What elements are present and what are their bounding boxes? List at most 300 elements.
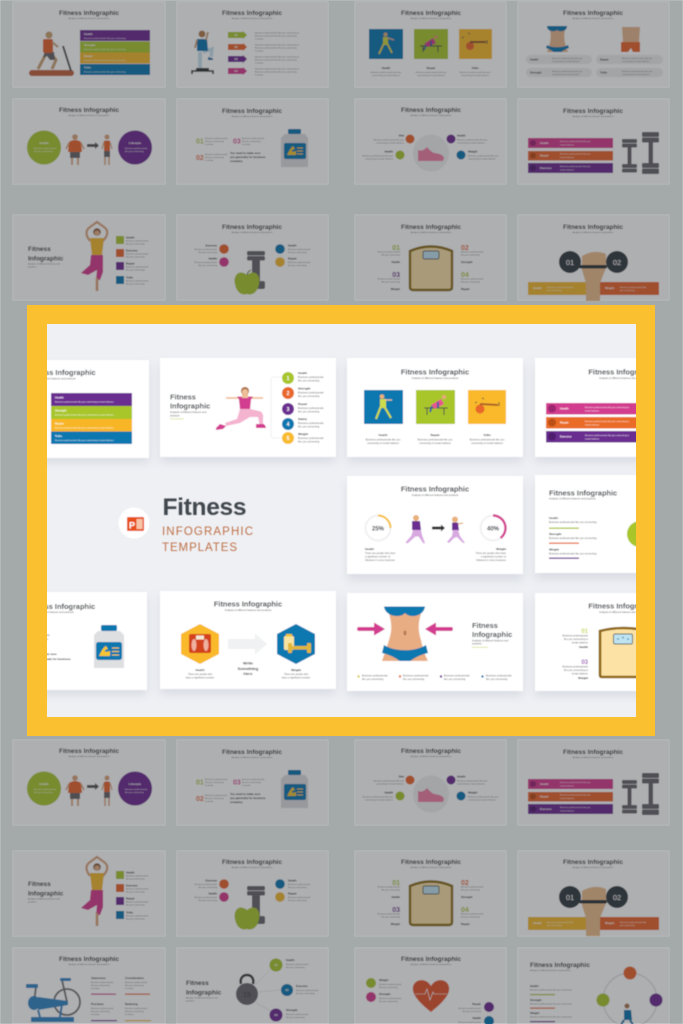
slide: hand and weight	[518, 215, 669, 301]
slide: weight scale (repeat): Health	[391, 895, 400, 899]
slide: weight loss circles	[13, 99, 165, 184]
yellow frame	[27, 305, 655, 736]
slide: supplement bottle: Analysis of different features and products	[232, 115, 273, 118]
hexagon captions: Weight	[291, 668, 301, 672]
text columns: to innate	[91, 987, 100, 990]
icon: bottle	[94, 625, 124, 668]
slide: weight loss circles: Analysis of different features and products	[69, 114, 110, 117]
subheading: TEMPLATES	[162, 542, 237, 554]
slide: yoga pose (repeat)	[13, 851, 165, 936]
square captions: Tollis	[483, 433, 491, 437]
slide: running shoe (repeat): Weight	[468, 790, 477, 794]
icon: male torso	[621, 27, 640, 52]
square captions: Business professionals like you	[366, 438, 401, 442]
green circle: Health	[39, 141, 49, 145]
card: bottle cut off: Analysis of different features and products	[27, 611, 74, 614]
numbered list: Safety	[298, 417, 307, 421]
bars: innate balance	[560, 144, 575, 146]
text columns: to innate	[91, 1013, 100, 1016]
square: bench	[416, 390, 455, 424]
slide: supplement bottle	[177, 99, 328, 184]
bullet notes	[357, 674, 512, 681]
slide: dumbbells (repeat): Business professionals like you	[560, 781, 591, 784]
scale labels: like you connecting	[461, 254, 480, 256]
side labels: like you connecting	[379, 1000, 398, 1003]
slide: running shoe (repeat): connecting to innate balance	[457, 782, 486, 786]
numbered items: like you connecting	[205, 140, 224, 143]
foreground slides	[24, 358, 657, 696]
captions: Health	[365, 547, 374, 551]
lower repeat row 1	[13, 740, 669, 825]
note: You need to make sure	[24, 652, 57, 656]
item 03: 03	[581, 660, 589, 666]
slide: running shoe (repeat): Business professionals like you	[374, 780, 405, 782]
icon: kettlebell: 15	[243, 992, 251, 999]
slide: weight scale (repeat): Business professionals	[378, 886, 401, 888]
slide: weight loss circles (repeat): like you connecting	[125, 791, 144, 794]
text columns: like you connecting	[91, 1010, 110, 1013]
text columns: to innate	[125, 987, 134, 990]
heading: Analysis of different features and	[186, 996, 219, 1000]
slide: hand and weight (repeat)	[518, 851, 669, 936]
card: bottle cut off	[24, 592, 147, 690]
square captions: connecting to innate balance	[372, 74, 401, 77]
square captions: connecting to innate balance	[419, 442, 452, 445]
side labels: Repair	[472, 1002, 482, 1006]
note	[47, 634, 71, 660]
numbered nodes: like you connecting	[286, 1016, 305, 1019]
icon: torso	[382, 606, 428, 661]
square: bench	[414, 29, 448, 59]
icon list	[116, 236, 149, 286]
numbered nodes	[256, 958, 319, 1022]
side labels: Business professionals	[195, 261, 218, 264]
slide: supplement bottle (repeat): like you connecting	[242, 781, 261, 784]
slide: hand and weight (repeat): you connecting	[620, 924, 635, 927]
heading: Infographic	[170, 402, 210, 410]
slide: torsos and pills: Fitness Infographic	[563, 10, 623, 17]
pills: Strength	[530, 70, 542, 74]
ring diagram	[596, 966, 662, 1024]
slide: supplement bottle (repeat): You need to make sure	[230, 792, 261, 796]
side labels: like you connecting	[198, 264, 218, 267]
slide: yoga pose	[13, 215, 165, 300]
note: you generally made for business	[24, 657, 71, 661]
descriptions: in innate	[255, 62, 264, 64]
slide: dumbbells: Fitness Infographic	[563, 108, 623, 115]
card: bottle cut off: Fitness Infographic	[27, 602, 95, 611]
card: scale cut off: Fitness Infographic	[588, 602, 657, 610]
slide: supplement bottle (repeat): to innate	[242, 784, 251, 787]
card: three squares: Fitness Infographic	[401, 368, 469, 376]
item 01	[562, 629, 589, 649]
subheading: INFOGRAPHIC	[162, 526, 253, 538]
numbered items: 02	[196, 155, 204, 162]
slide: running shoe (repeat): Diet	[399, 774, 404, 778]
icon: apple	[235, 270, 259, 294]
slide: apple and dumbbell (repeat): like you connecting	[198, 899, 218, 902]
icon: bottle	[281, 129, 308, 167]
centre title block	[118, 494, 253, 554]
arrow	[432, 524, 445, 532]
bullet notes: like you connecting	[362, 678, 384, 681]
stacked colored bars: Strength	[84, 43, 96, 47]
slide: weight loss circles (repeat): Business professionals	[125, 788, 148, 791]
slide: yoga pose (repeat): Analysis of different features and	[28, 898, 61, 900]
purple circle	[118, 130, 152, 164]
icon list: like you connecting	[126, 282, 145, 286]
captions: a significant number of	[365, 556, 390, 558]
numbered list	[282, 371, 324, 444]
slide: hand and weight: Analysis of different features and products	[573, 231, 614, 234]
captions: followers in every business	[365, 559, 396, 562]
slide: exercise bike: Analysis of different features and products	[69, 963, 110, 966]
heading	[28, 246, 64, 268]
hexagon: scale	[181, 624, 219, 664]
card: progress rules: Fitness Infographic	[549, 488, 617, 498]
orbit nodes: connecting to innate balance	[468, 158, 497, 160]
item 01: 01	[581, 629, 589, 635]
card: three bars cut off: Fitness Infographic	[588, 368, 657, 376]
icon: bike	[26, 978, 80, 1022]
bullet notes: Business professionals	[444, 674, 470, 678]
icon: fist	[579, 252, 607, 301]
slide: hand and weight (repeat): Business professionals like	[620, 921, 647, 924]
bar: health: Health	[560, 406, 569, 410]
square captions: connecting to innate balance	[417, 74, 446, 77]
slide: weight scale (repeat): like you connecting	[381, 916, 401, 918]
slide: yoga pose (repeat): like you connecting	[126, 904, 145, 906]
numbered arrows	[228, 31, 247, 75]
pills: Tollis	[600, 70, 608, 74]
arrow label	[238, 660, 259, 676]
orbit nodes: Health	[384, 150, 393, 154]
side labels: like you connecting	[288, 264, 307, 267]
icon: heavy man	[66, 134, 84, 165]
side labels: Business professionals	[288, 261, 311, 264]
hexagon captions: There are people who	[284, 673, 309, 676]
bullet notes: Business professionals	[362, 674, 388, 678]
slide: running shoe (repeat): Analysis of different features and products	[411, 755, 452, 758]
numbered list: like you connecting	[298, 440, 320, 444]
descriptions: in innate	[255, 74, 264, 76]
slide: heart: Analysis of different features and products	[411, 963, 452, 966]
slide: supplement bottle (repeat)	[177, 740, 328, 825]
bullet notes: like you connecting	[403, 678, 425, 681]
slide: running shoe (repeat): Business professionals like you	[457, 780, 488, 782]
text columns	[91, 976, 151, 1021]
hexagon captions: There are people who	[188, 673, 213, 676]
descriptions	[255, 32, 300, 76]
bar: strength: Business professionals like you connecting to innate balance	[55, 414, 115, 416]
slide: weight scale (repeat): Weight	[391, 922, 400, 926]
icon list: Business professionals	[126, 280, 149, 282]
card: hexagons: Fitness Infographic	[214, 600, 282, 608]
item 03: Business professionals	[562, 666, 589, 668]
numbered nodes: like you connecting	[286, 966, 305, 969]
scale labels: like you connecting	[381, 254, 401, 256]
card: stacked bars: Fitness Infographic	[28, 368, 96, 377]
numbered list: Business professionals	[298, 437, 324, 440]
slide: yoga pose (repeat): Exercise	[126, 884, 138, 888]
card: three squares	[347, 358, 523, 457]
side labels: Exercise	[205, 244, 217, 248]
side labels: Business professionals	[288, 248, 311, 251]
rows: Business professionals like you connecting	[549, 537, 597, 540]
numbered list: Business professionals	[298, 407, 324, 410]
text columns: Business professionals	[125, 1007, 148, 1010]
slide: running shoe (repeat): Health	[384, 790, 393, 794]
note: company	[24, 662, 38, 666]
heading: Fitness	[186, 980, 209, 987]
slide: dumbbells (repeat): innate balance	[560, 784, 575, 788]
pills: connecting to innate balance	[622, 60, 651, 63]
slide: yoga pose (repeat): Business professionals	[126, 888, 149, 890]
icon: stepper figure	[192, 31, 213, 74]
side labels: like you connecting	[462, 1010, 482, 1013]
slide: three squares: Analysis of different features and products	[411, 17, 452, 20]
slide: dumbbells (repeat): Health	[540, 782, 549, 786]
slide: weight scale (repeat): Strength	[461, 895, 473, 899]
orange and yellow bars: you connecting	[547, 289, 562, 292]
orbit nodes: connecting to innate balance	[457, 142, 486, 144]
scale labels: Repair	[461, 287, 471, 291]
heading: Fitness	[170, 392, 196, 402]
stacked colored bars: Business professionals like you connecting	[84, 48, 126, 51]
slide: weight loss circles (repeat): Analysis of different features and products	[69, 755, 110, 758]
numbered items: like you connecting	[205, 156, 224, 159]
captions: a significant number of	[481, 556, 506, 558]
side labels	[366, 978, 494, 1024]
numbered items: Business professionals	[242, 137, 265, 140]
descriptions: Business professionals like you connecting to	[255, 56, 300, 58]
item 03	[562, 660, 589, 680]
slide: weight scale (repeat): Business professionals	[461, 886, 484, 888]
slide: apple and dumbbell (repeat): Repair	[288, 892, 298, 896]
numbered list: Weight	[298, 432, 308, 436]
slide: yoga pose (repeat): Business professionals	[126, 900, 149, 904]
descriptions: Business professionals like you connecting	[255, 46, 297, 50]
orbit nodes: connecting to innate balance	[365, 158, 394, 160]
pills: Business professionals like you	[552, 57, 583, 60]
numbered items: to innate	[205, 159, 214, 162]
item 01: Business professionals	[562, 634, 589, 638]
slide: weight loss circles (repeat): Lifestyle	[129, 782, 141, 786]
slide: hand and weight (repeat): Fitness Infographic	[563, 859, 623, 866]
numbered list: like you connecting	[298, 380, 320, 382]
slide: supplement bottle (repeat): to innate	[205, 784, 214, 787]
bars: Health	[540, 141, 549, 145]
slide: supplement bottle (repeat): Fitness Infographic	[222, 749, 282, 756]
slide: dumbbells (repeat): Repair	[540, 794, 550, 798]
numbered nodes: 03	[274, 1013, 278, 1017]
bar: health: Health	[55, 396, 64, 400]
arrow: right	[425, 622, 453, 636]
slide: torsos and pills	[518, 2, 669, 87]
hexagon captions	[186, 668, 310, 680]
card: percent donuts: Analysis of different features and products	[412, 494, 459, 497]
side labels: Weight	[379, 978, 388, 982]
arrow label: Here	[244, 671, 253, 676]
numbered items: 01	[196, 138, 204, 146]
slide: supplement bottle (repeat): Business professionals	[205, 794, 228, 797]
slide: kettlebell	[177, 948, 328, 1024]
icon: shoe in circle	[413, 134, 449, 172]
slide: yoga pose (repeat): like you connecting	[126, 918, 145, 920]
scale labels: Strength	[461, 260, 473, 264]
stacked colored bars: Repair	[84, 54, 94, 58]
slide: dumbbells (repeat): Business professionals like you	[560, 794, 591, 796]
green circle: Business professionals	[34, 147, 57, 150]
slide: apple and dumbbell (repeat): Business professionals	[288, 896, 311, 899]
rows: Business professionals like you connecting	[549, 552, 597, 556]
icon: scale	[410, 246, 452, 290]
slide: dumbbells	[518, 99, 669, 184]
heading: products	[472, 642, 482, 646]
text columns: Consideration	[125, 976, 144, 980]
pills: Repair	[600, 58, 610, 62]
heading: Analysis of different features and	[472, 640, 509, 642]
numbered nodes: 02	[285, 988, 289, 992]
bar: repair: Business professionals like you connecting to	[585, 420, 630, 423]
progress rows: Health	[530, 984, 539, 988]
orange and yellow bars: Health	[533, 286, 542, 290]
square captions: Business professionals like you	[470, 438, 505, 442]
icon list: Health	[126, 236, 135, 240]
numbered items: Business professionals	[205, 153, 228, 156]
bar: exercise: Business professionals like you connecting to	[585, 434, 630, 437]
slide: running shoe (repeat): connecting to innate balance	[365, 798, 394, 802]
note: Business professionals	[24, 634, 50, 637]
item 01: like you connecting to	[564, 638, 589, 641]
heading	[472, 621, 512, 648]
stacked colored bars: Business professionals like you connecting	[84, 70, 126, 74]
arrow: left	[357, 622, 385, 636]
bar: repair: innate balance	[585, 424, 600, 426]
slide: apple and dumbbell (repeat): Health	[288, 878, 297, 882]
slide: supplement bottle (repeat): Analysis of different features and products	[232, 756, 273, 759]
slide: running shoe (repeat): connecting to innate balance	[468, 798, 497, 802]
descriptions: Business professionals like you connecting to	[255, 44, 300, 46]
scale labels	[378, 245, 484, 291]
square captions: Business professionals like you	[416, 71, 447, 74]
numbered list: Business professionals	[298, 376, 324, 379]
numbered nodes: Business professionals	[286, 1013, 309, 1016]
donut: 25 percent	[366, 516, 390, 540]
slide: dumbbells: Analysis of different features and products	[573, 115, 614, 118]
bar: repair	[546, 417, 646, 428]
descriptions: in innate	[255, 38, 264, 40]
square captions: Business professionals like you	[418, 438, 453, 442]
slide: running shoe (repeat): Health	[457, 774, 466, 778]
card: lunge with numbered list	[160, 358, 336, 457]
slide: supplement bottle (repeat): Business professionals	[242, 778, 265, 781]
numbered nodes: like you connecting	[296, 992, 315, 995]
side labels: like you connecting	[288, 251, 307, 254]
bar: strength	[51, 406, 132, 419]
square captions: connecting to innate balance	[367, 442, 400, 445]
slide: supplement bottle (repeat): 02	[196, 796, 204, 803]
slide: dumbbells (repeat): innate balance	[560, 797, 575, 800]
square: walker	[369, 29, 403, 59]
square captions: Business professionals like you	[460, 71, 491, 74]
pills: Health	[530, 58, 539, 62]
numbered nodes: Business professionals	[286, 963, 309, 966]
descriptions: Business professionals like you connecting	[255, 58, 297, 62]
heading: Fitness	[28, 246, 51, 253]
slide: yoga pose (repeat): like you connecting	[126, 890, 145, 894]
slide: three squares: Fitness Infographic	[401, 10, 461, 17]
numbered arrows: 01	[234, 33, 238, 37]
slide: weight loss circles (repeat)	[13, 740, 165, 825]
numbered nodes: Exercise	[296, 984, 308, 988]
slide: weight scale (repeat): 02	[461, 880, 469, 887]
numbered list: 4	[287, 422, 290, 428]
pills: Business professionals like you	[622, 57, 653, 60]
slide: hand and weight (repeat): you connecting	[547, 924, 562, 927]
numbered list: 5	[287, 436, 290, 442]
card: hexagons: Analysis of different features and products	[225, 609, 272, 612]
slide: heart	[355, 948, 506, 1024]
pills: Business professionals like you	[622, 70, 653, 73]
donut: 40 percent: 40%	[487, 526, 500, 532]
slide: supplement bottle (repeat): like you connecting	[205, 797, 224, 800]
text columns: Business professionals	[125, 981, 148, 984]
slide: apple and dumbbell (repeat): Health	[208, 892, 217, 896]
heading	[170, 392, 210, 419]
card: three squares: Analysis of different features and products	[412, 377, 459, 380]
slide: supplement bottle (repeat): you generally for business	[230, 796, 266, 800]
arrow	[87, 142, 99, 149]
slide: weight loss circles: Fitness Infographic	[59, 107, 119, 114]
descriptions: in innate	[255, 50, 264, 52]
card: hexagons	[160, 591, 336, 689]
square captions	[366, 433, 505, 445]
captions	[365, 547, 507, 562]
bar: health: Business professionals like you connecting to innate balance	[55, 400, 115, 404]
slide: yoga pose (repeat): Health	[126, 870, 135, 874]
slide: hand and weight (repeat): 01	[566, 893, 574, 902]
bar: repair	[51, 419, 132, 432]
text columns: Purchase	[91, 1002, 104, 1006]
orbit nodes: Business professionals like you	[363, 154, 394, 158]
heading	[186, 980, 222, 1002]
square captions: Repair	[427, 66, 436, 70]
numbered list: Health	[298, 371, 307, 375]
bar: exercise: Exercise	[560, 434, 572, 438]
bars: Business professionals like you	[560, 152, 591, 156]
text columns: Retaining	[125, 1002, 138, 1006]
orbit nodes: Weight	[468, 150, 477, 154]
card: percent donuts: Fitness Infographic	[401, 484, 469, 494]
scale labels: Business professionals	[378, 278, 401, 280]
icon list: like you connecting	[126, 242, 145, 246]
numbered items: 03	[233, 138, 241, 146]
orange and yellow bars: you connecting	[620, 289, 635, 292]
inner panel	[47, 324, 636, 717]
side labels: Strength	[379, 992, 391, 996]
icon: scale	[600, 628, 650, 677]
icon list: Business professionals	[126, 240, 149, 242]
pills: connecting to innate balance	[552, 60, 581, 63]
hexagon captions: have a significant number	[186, 676, 214, 680]
numbered list: like you connecting	[298, 410, 320, 414]
text columns: like you connecting	[125, 1010, 144, 1013]
slide: yoga pose (repeat): Business professionals	[126, 914, 149, 918]
slide: dumbbells (repeat): Analysis of different features and products	[573, 756, 614, 759]
numbered list: like you connecting	[298, 426, 320, 428]
slide: hand and weight (repeat): Weight	[605, 921, 614, 925]
